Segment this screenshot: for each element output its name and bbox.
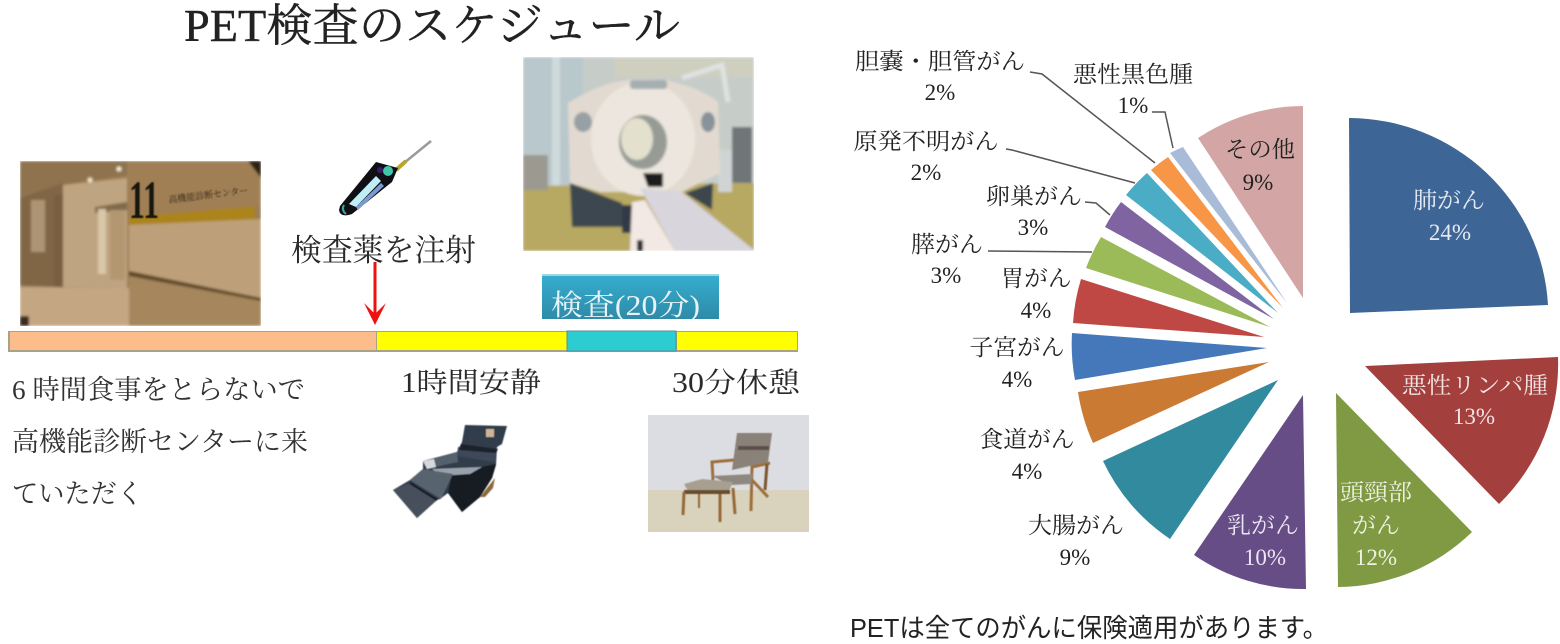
leader lines bbox=[988, 72, 1173, 252]
text block: fasting instruction: 6 時間食事をとらないで bbox=[12, 375, 305, 405]
chart labels: 10% bbox=[1244, 545, 1286, 570]
slice: malignant lymphoma bbox=[1365, 357, 1558, 504]
segment: scan bbox=[567, 331, 676, 351]
chart labels: 2% bbox=[911, 160, 941, 185]
segment: rest 1 hour bbox=[377, 332, 567, 350]
slice: gallbladder and bile duct bbox=[1151, 157, 1283, 308]
chart labels: 食道がん bbox=[980, 427, 1074, 452]
chart labels: 1% bbox=[1118, 93, 1148, 118]
segment: rest 30 minutes bbox=[677, 332, 797, 350]
chart labels: 3% bbox=[1018, 215, 1048, 240]
chart labels: 悪性リンパ腫 bbox=[1402, 373, 1548, 398]
chart labels: 13% bbox=[1453, 404, 1495, 429]
chart labels: 大腸がん bbox=[1028, 513, 1124, 538]
photo: chair with ottoman bbox=[648, 415, 809, 532]
chart labels: 悪性黒色腫 bbox=[1073, 62, 1193, 87]
segment: fasting bbox=[10, 332, 376, 350]
slice: other bbox=[1198, 106, 1303, 298]
sign text: 高機能診断センター bbox=[168, 184, 249, 205]
chart labels: 肺がん bbox=[1413, 188, 1485, 213]
slice: pancreas bbox=[1086, 237, 1270, 327]
chart labels bbox=[854, 49, 1548, 570]
slice: head and neck bbox=[1336, 393, 1472, 587]
chart labels: 原発不明がん bbox=[854, 129, 998, 154]
slice: lung bbox=[1349, 118, 1548, 313]
slice: unknown primary bbox=[1126, 173, 1278, 313]
slice: colorectal bbox=[1103, 380, 1278, 539]
photo: recliner bbox=[393, 425, 507, 518]
title: PET検査のスケジュール bbox=[184, 1, 680, 51]
pie chart: cancer types bbox=[1072, 106, 1558, 589]
chart labels: 頭頸部 bbox=[1340, 480, 1412, 505]
timeline bar bbox=[8, 331, 798, 352]
chart labels: 子宮がん bbox=[970, 335, 1064, 360]
chart labels: 4% bbox=[1002, 367, 1032, 392]
slice: uterus bbox=[1072, 333, 1267, 380]
box: scan 20 minutes: 検査(20分) bbox=[551, 289, 700, 322]
slice: esophagus bbox=[1078, 362, 1269, 443]
label: inject tracer: 検査薬を注射 bbox=[291, 233, 476, 268]
icon: syringe bbox=[339, 141, 431, 215]
text block: fasting instruction: 高機能診断センターに来 bbox=[12, 427, 308, 457]
chart labels: 2% bbox=[925, 80, 955, 105]
chart labels: 胃がん bbox=[1000, 266, 1072, 291]
chart labels: 乳がん bbox=[1227, 513, 1299, 538]
chart labels: 3% bbox=[931, 263, 961, 288]
chart labels: 4% bbox=[1021, 298, 1051, 323]
footnote: insurance coverage: PETは全てのがんに保険適用があります。 bbox=[850, 613, 1328, 643]
chart labels: 4% bbox=[1012, 459, 1042, 484]
slice: ovary bbox=[1105, 202, 1274, 319]
slice: breast bbox=[1194, 395, 1306, 589]
text block: fasting instruction bbox=[12, 375, 308, 509]
label: rest 1 hour: 1時間安静 bbox=[401, 367, 541, 399]
sign number: 11 bbox=[129, 170, 159, 230]
chart labels: がん bbox=[1352, 513, 1400, 538]
photo: high-function diagnostic center hallway bbox=[20, 161, 261, 326]
chart labels: 24% bbox=[1429, 220, 1471, 245]
photo: PET scanner bbox=[523, 57, 754, 251]
text block: fasting instruction: ていただく bbox=[12, 479, 143, 509]
label: rest 30 minutes: 30分休憩 bbox=[672, 367, 801, 399]
arrow: injection time bbox=[364, 262, 386, 325]
chart labels: 卵巣がん bbox=[986, 184, 1082, 209]
chart labels: 12% bbox=[1355, 545, 1397, 570]
chart labels: 9% bbox=[1243, 170, 1273, 195]
chart labels: その他 bbox=[1225, 137, 1295, 162]
chart labels: 胆嚢・胆管がん bbox=[855, 49, 1025, 74]
chart labels: 膵がん bbox=[911, 232, 983, 257]
slice: melanoma bbox=[1170, 147, 1287, 303]
slice: stomach bbox=[1073, 279, 1264, 337]
box: scan 20 minutes bbox=[542, 274, 719, 322]
chart labels: 9% bbox=[1060, 545, 1090, 570]
